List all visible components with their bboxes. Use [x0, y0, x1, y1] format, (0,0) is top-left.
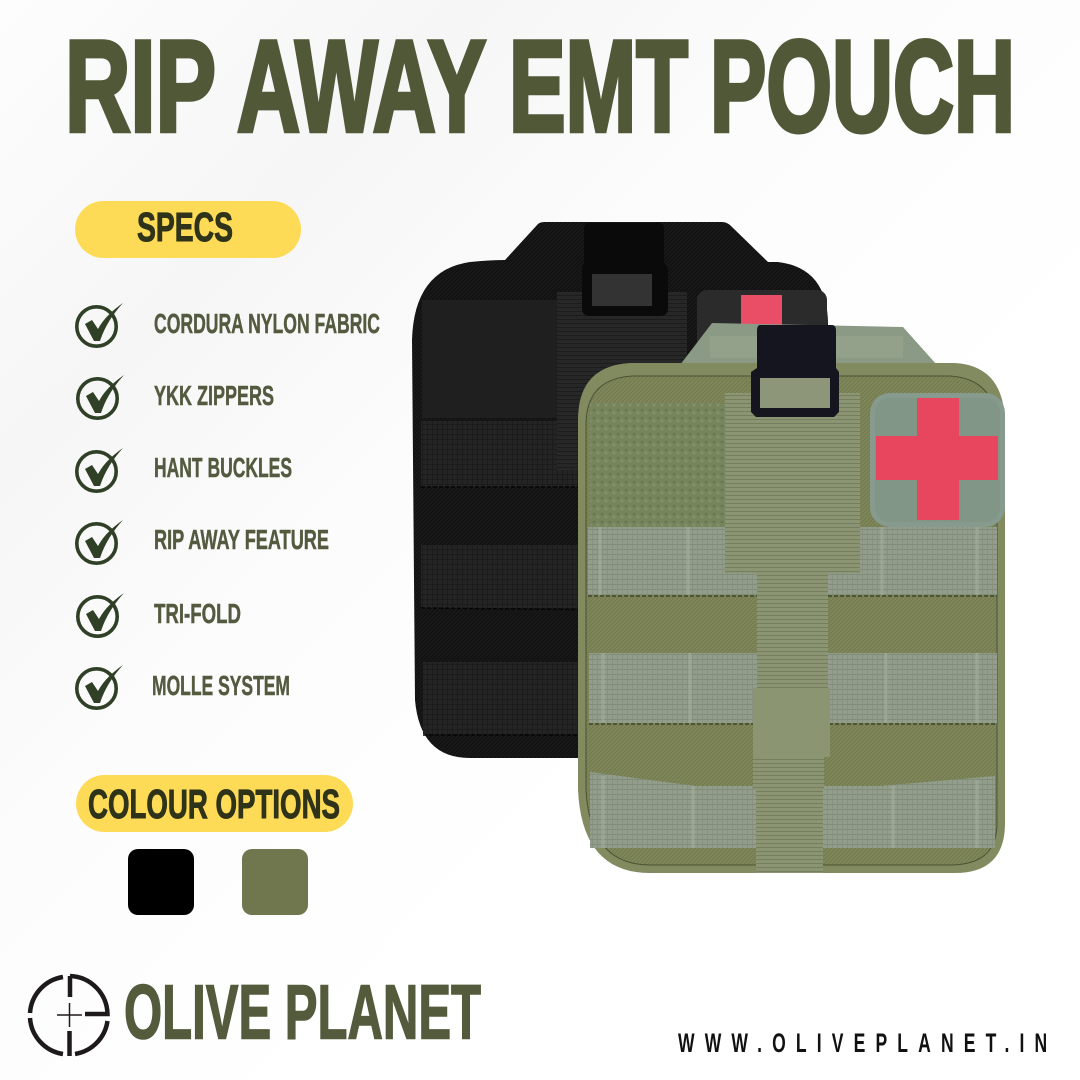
panel: colour options [76, 775, 353, 915]
spec item: ykk zippers: YKK ZIPPERS [154, 380, 274, 411]
title: RIP [65, 13, 216, 159]
icon: crosshair [30, 976, 108, 1056]
brand name: OLIVE PLANET [124, 970, 481, 1056]
spec item: hant buckles: HANT BUCKLES [154, 452, 292, 483]
spec item: molle system: MOLLE SYSTEM [152, 670, 290, 701]
icon: check [78, 593, 124, 636]
velcro panel [590, 403, 727, 527]
strap [557, 292, 687, 470]
vertical strap [757, 405, 828, 688]
title [65, 13, 1015, 159]
medical patch [870, 393, 1005, 527]
back tab [680, 323, 937, 365]
title: EMT [509, 13, 688, 159]
strap flap [725, 393, 860, 573]
colour options heading pill: COLOUR OPTIONS [88, 781, 340, 827]
swatch: olive [242, 849, 308, 915]
icon: check [78, 375, 124, 418]
specs heading pill [75, 201, 301, 258]
spec item: cordura nylon fabric: CORDURA NYLON FABRIC [154, 308, 380, 339]
spec item: hant buckles [77, 448, 292, 491]
logo: olive planet [30, 970, 481, 1056]
spec item: rip away feature [77, 520, 329, 563]
swatch: black [128, 849, 194, 915]
webbing rows [421, 421, 823, 735]
red cross [876, 398, 998, 520]
buckle [582, 223, 668, 316]
buckle [751, 325, 839, 417]
icon: check [77, 665, 123, 708]
black pouch [412, 222, 828, 758]
strap keeper [753, 688, 830, 757]
pouch body [578, 363, 1005, 873]
spec item: ykk zippers [78, 375, 274, 418]
webbing rows [588, 527, 997, 848]
olive pouch [578, 323, 1005, 873]
spec item: cordura nylon fabric [77, 303, 380, 346]
icon: check [77, 520, 123, 563]
website url: WWW.OLIVEPLANET.IN [678, 1027, 1047, 1058]
medical patch [697, 290, 827, 350]
specs heading pill: SPECS [137, 204, 233, 250]
title: AWAY [237, 13, 486, 159]
spec item: molle system [77, 665, 290, 708]
panel: specs list [75, 201, 380, 708]
spec item: tri-fold [78, 593, 241, 636]
velcro panel [422, 300, 557, 418]
icon: check [77, 448, 123, 491]
spec item: tri-fold: TRI-FOLD [154, 598, 241, 629]
colour options heading pill [76, 775, 353, 832]
icon: check [77, 303, 123, 346]
spec item: rip away feature: RIP AWAY FEATURE [154, 524, 329, 555]
